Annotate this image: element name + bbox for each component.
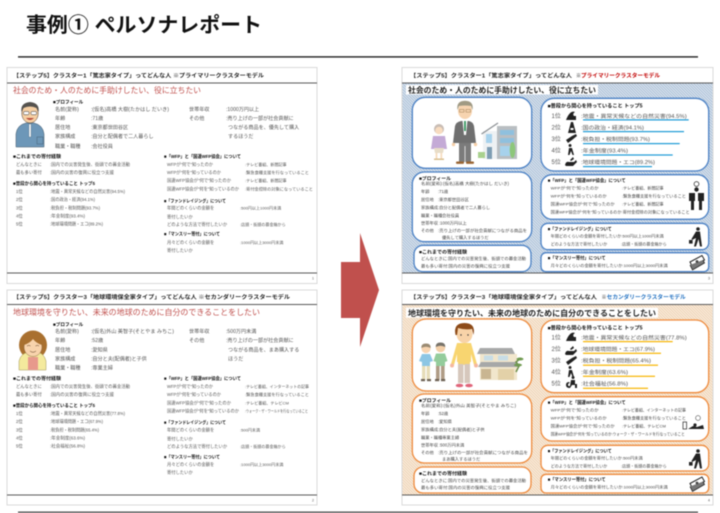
WFP section: :テレビ番組、新聞記事	[245, 161, 287, 167]
panel: WFP: ■「WFP」と「国連WFP協会」について	[548, 399, 626, 406]
ranking rows: 1位	[552, 112, 561, 120]
panel: fundraising: ■「ファンドレイジング」について	[548, 225, 612, 232]
panel: WFP: 国連WFP協会が"何で"知ったのか	[551, 423, 615, 429]
monthly section: :1000円以上3000円未満	[240, 461, 283, 467]
WFP section: WFPが"何を"知っているのか	[167, 169, 222, 176]
heading: slide 4	[410, 293, 686, 301]
panel: fundraising: :店頭・街頭の募金箱から	[621, 240, 667, 246]
title: 事例① ペルソナレポート	[26, 14, 262, 37]
profile: ほうだ	[228, 357, 243, 363]
panel: slide 2 before	[7, 290, 317, 505]
interests top 5: 4位	[16, 212, 23, 218]
profile: 家族構成	[55, 133, 75, 140]
panel: WFP: 国連WFP協会が"何を"知っているのか:寄付金控除の対象になっていること	[551, 209, 690, 215]
donation history	[13, 375, 131, 398]
icon: modern house	[478, 123, 517, 159]
interests top 5: :地球環境問題・エコ(67.9%)	[50, 418, 104, 425]
profile: :500万円未満	[226, 328, 256, 335]
monthly section	[164, 453, 283, 476]
panel: fundraising: ■「ファンドレイジング」について	[548, 447, 612, 454]
tagline: 社会のため・人のために手助けしたい、役に立ちたい	[13, 85, 201, 95]
monthly section: 月々どのくらいの金額を	[167, 461, 214, 468]
panel: WFP: :テレビ番組、新聞記事	[622, 185, 664, 191]
icon: grandfather	[434, 342, 448, 381]
interests top 5: 5位	[16, 220, 23, 226]
WFP section: 国連WFP協会が"何を"知っているのか	[167, 186, 240, 193]
profile: :1000万円以上	[226, 106, 259, 113]
interests top 5: ■普段から関心を持っていること トップ5	[13, 402, 95, 409]
panel: profile: :自分と夫(配偶者)と子供	[438, 426, 485, 433]
icon: main person	[450, 323, 478, 387]
profile: :自分と夫(配偶者)と子供	[91, 356, 147, 363]
ranking rows: 2位	[552, 345, 561, 353]
panel: donation history: どんなときに:国内での災害発生後、街頭での募金活動	[421, 477, 526, 484]
donation history: 最も多い寄付	[16, 391, 42, 398]
panel: WFP: 国連WFP協会が"何を"知っているのか:ウォーク・ザ・ワールドを行なっていること	[551, 431, 685, 437]
panel: monthly: ■「マンスリー寄付」について	[548, 254, 606, 262]
fundraising section: 寄付したいか	[167, 213, 193, 220]
heading: slide 4: 【ステップ5】クラスター3「地球環境保全家タイプ」ってどんな人	[410, 293, 597, 301]
profile: :売り上げの一部が社会貢献に	[226, 337, 294, 344]
heading: slide 4: ※	[602, 294, 606, 301]
icon: japanese house	[477, 348, 524, 380]
panel: fundraising	[541, 445, 709, 471]
panel: interests top 5	[541, 320, 709, 393]
WFP section: ■「WFP」と「国連WFP協会」について	[164, 153, 241, 160]
tagline band: 社会のため・人のために手助けしたい、役に立ちたい	[408, 85, 596, 95]
profile: 職業・職種	[55, 365, 80, 372]
WFP section: :緊急食糧支援を行なっていること	[245, 169, 309, 175]
profile: 世帯年収	[189, 106, 209, 113]
panel: WFP: :テレビ番組、テレビCM	[622, 423, 666, 429]
profile: 年齢	[55, 337, 65, 344]
panel: WFP: WFPが"何を"知っているのか	[551, 193, 607, 199]
panel: profile: ■プロフィール	[419, 397, 451, 404]
profile: 居住地	[55, 347, 70, 354]
interests top 5: 2位	[16, 418, 23, 424]
page number: 2	[312, 498, 314, 502]
fundraising section	[164, 197, 286, 228]
WFP section: 国連WFP協会が"何で"知ったのか	[167, 400, 232, 407]
panel: fundraising: どのような方法で寄付したいか	[551, 462, 607, 468]
panel: profile: :会社役員	[441, 212, 460, 219]
WFP section: :テレビ番組、インターネットの記事	[245, 383, 309, 389]
interests top 5: :国の政治・経済(94.1%)	[50, 196, 96, 203]
profile	[53, 99, 299, 150]
profile: 職業・職種	[55, 143, 80, 150]
panel: WFP: 国連WFP協会が"何で"知ったのか	[551, 201, 615, 207]
ranking rows: :税負担・税制問題(65.4%)	[581, 356, 651, 364]
interests top 5	[13, 180, 126, 227]
fundraising section: どのような方法で寄付したいか	[167, 221, 228, 228]
donation history: どんなときに	[16, 383, 42, 390]
profile: 年齢	[55, 115, 65, 122]
panel: donation history: ■これまでの寄付経験	[419, 248, 467, 255]
panel: profile: :自分と配偶者で二人暮らし	[438, 204, 490, 211]
fundraising section: ■「ファンドレイジング」について	[164, 419, 226, 426]
heading: slide 3: プライマリークラスターモデル	[581, 71, 660, 79]
WFP section	[164, 153, 313, 193]
fundraising section: 年間どのくらいの金額を	[167, 427, 214, 434]
profile: するほうだ	[228, 134, 253, 140]
panel: profile: :52歳	[438, 410, 449, 416]
panel: profile: :売り上げの一部が社会貢献につながる商品を	[438, 449, 528, 456]
WFP section: WFPが"何で"知ったのか	[167, 383, 214, 390]
icon: man in suit	[452, 101, 477, 164]
panel: profile: 居住地	[421, 418, 435, 425]
donation history: :国内の災害の復興に役立つ支援	[50, 169, 115, 176]
interests top 5: :社会福祉(56.8%)	[50, 443, 86, 450]
icon: money stack	[690, 477, 704, 492]
ranking rows: :地球環境問題・エコ(67.9%)	[581, 345, 655, 353]
icon: man avatar	[16, 102, 44, 147]
icon: lying person with phone	[683, 416, 704, 429]
WFP section: :緊急食糧支援を行なっていること	[245, 391, 309, 397]
profile: :自分と配偶者で二人暮らし	[91, 133, 154, 140]
page number: 4	[708, 498, 710, 502]
panel: profile: その他	[421, 449, 435, 456]
profile: その他	[189, 115, 204, 122]
panel: interests top 5: ■普段から関心を持っていること トップ5	[548, 103, 643, 110]
donation history: 最も多い寄付	[16, 169, 42, 176]
panel: profile: :東京都世田谷区	[438, 196, 470, 203]
WFP section: ■「WFP」と「国連WFP協会」について	[164, 375, 241, 382]
icon: person with bag	[689, 449, 702, 468]
interests top 5: :税負担・税制問題(65.4%)	[50, 427, 100, 434]
fundraising section: :店頭・街頭の募金箱から	[240, 221, 286, 227]
panel: profile: :71歳	[438, 188, 449, 194]
profile	[53, 321, 299, 372]
heading: slide 3	[410, 71, 660, 79]
panel: profile: 優先して購入するほうだ	[442, 234, 489, 241]
bar underlines	[583, 119, 689, 167]
heading: slide 3: ※	[576, 72, 581, 79]
profile: :会社役員	[91, 143, 113, 150]
interests top 5: 3位	[16, 204, 23, 210]
monthly section	[164, 231, 283, 254]
panel: WFP: :緊急食糧支援を行なっていること	[622, 415, 686, 421]
ranking rows: :地震・異常天候などの自然災害(94.5%)	[581, 112, 687, 120]
interests top 5: 3位	[16, 427, 23, 433]
panel: WFP: WFPが"何で"知ったのか	[551, 185, 599, 191]
ranking rows: :年金制度(63.6%)	[581, 368, 628, 376]
panel: profile: :1000万円以上	[439, 220, 467, 227]
profile: :専業主婦	[91, 365, 113, 372]
interests top 5: :税負担・税制問題(93.7%)	[50, 204, 101, 211]
profile: 家族構成	[55, 356, 75, 363]
panel: profile: その他	[421, 227, 435, 234]
WFP section: :テレビ番組、新聞記事	[245, 177, 287, 183]
interests top 5: :地震・異常天候などの自然災害(77.8%)	[50, 410, 126, 417]
donation history: ■これまでの寄付経験	[13, 153, 61, 160]
panel: fundraising: 年間どのくらいの金額を寄付したいか:500円未満	[551, 455, 643, 461]
panel: profile: 家族構成	[421, 426, 439, 433]
bottom rule	[18, 512, 698, 513]
interests top 5: :地球環境問題・エコ(89.2%)	[50, 220, 104, 227]
panel: profile: 名前(愛称):(仮名)外山 美智子(そとやま みちこ)	[421, 402, 517, 409]
profile: :52歳	[91, 337, 103, 344]
ranking rows: :年金制度(93.4%)	[581, 146, 628, 154]
monthly section: 月々どのくらいの金額を	[167, 239, 214, 246]
panel: donation history: ■これまでの寄付経験	[419, 470, 467, 477]
panel: fundraising: :店頭・街頭の募金箱から	[621, 462, 667, 468]
WFP section: WFPが"何を"知っているのか	[167, 391, 222, 398]
icon: father	[419, 344, 433, 381]
profile: その他	[189, 337, 204, 344]
monthly section: ■「マンスリー寄付」について	[164, 453, 220, 460]
bar underlines	[583, 341, 673, 389]
panel: WFP: :テレビ番組、インターネットの記事	[622, 407, 686, 413]
panel: WFP	[541, 397, 709, 441]
panel: profile: :愛知県	[438, 418, 453, 425]
arrow	[341, 233, 379, 347]
panel: donation history: 最も多い寄付:国内の災害の復興に役立つ支援	[421, 262, 511, 270]
panel: profile: 職業・職種	[421, 212, 443, 219]
monthly section: 寄付したいか	[167, 469, 193, 476]
interests top 5: :年金制度(93.4%)	[50, 212, 86, 219]
panel: donation history: どんなときに:国内での災害発生後、街頭での募金活動	[421, 255, 526, 262]
panel: profile: 居住地	[421, 196, 435, 203]
page number: 1	[312, 276, 314, 280]
panel: slide 3 after	[402, 68, 713, 284]
ranking rows: 4位	[552, 146, 561, 154]
profile: :愛知県	[91, 347, 108, 354]
ranking rows: :社会福祉(56.8%)	[581, 380, 628, 388]
panel: donation history: 最も多い寄付:国内の災害の復興に役立つ支援	[421, 484, 511, 491]
fundraising section: 年間どのくらいの金額を	[167, 205, 214, 212]
interests top 5: 1位	[16, 188, 23, 194]
icon: elderly woman	[431, 124, 447, 160]
panel: donation history	[414, 467, 531, 493]
donation history: :国内での災害発生後、街頭での募金活動	[50, 161, 131, 168]
panel: fundraising	[541, 223, 709, 250]
panel: monthly	[541, 253, 709, 272]
interests top 5: 2位	[16, 196, 23, 202]
panel: WFP	[541, 175, 709, 219]
profile: つながる商品を、まあ購入する	[228, 347, 299, 354]
profile: :(仮名)外山 美智子(そとやま みちこ)	[91, 328, 174, 335]
WFP section: WFPが"何で"知ったのか	[167, 161, 214, 168]
panel: fundraising: どのような方法で寄付したいか	[551, 240, 607, 246]
panel: profile: 年齢	[421, 410, 430, 417]
panel: monthly	[541, 474, 709, 493]
heading: slide 1: 【ステップ5】クラスター1「篤志家タイプ」ってどんな人 ※プライマリークラスターモデル	[13, 71, 264, 79]
WFP section: 国連WFP協会が"何を"知っているのか	[167, 408, 240, 415]
profile: ■プロフィール	[53, 321, 84, 328]
panel: profile: 家族構成	[421, 204, 439, 211]
title rule	[18, 56, 698, 58]
panel: profile	[412, 172, 532, 242]
panel: WFP: WFPが"何を"知っているのか	[551, 415, 607, 421]
interests top 5: ■普段から関心を持っていること トップ5	[13, 180, 95, 187]
ranking icons	[565, 112, 577, 166]
panel: profile: 名前(愛称):(仮名)高橋 大樹(たかはし だいき)	[421, 180, 510, 187]
profile: つながる商品を、優先して購入	[228, 124, 299, 131]
tagline: 地球環境を守りたい、未来の地球のために自分のできることをしたい	[13, 307, 260, 317]
profile: 世帯年収	[189, 328, 209, 335]
profile: :71歳	[91, 115, 103, 122]
panel: fundraising: 年間どのくらいの金額を寄付したいか:500円以上1000円未満	[551, 233, 664, 239]
panel: profile	[412, 394, 532, 463]
panel: donation history	[414, 245, 531, 272]
panel: profile: 年齢	[421, 188, 430, 195]
WFP section: :寄付金控除の対象になっていること	[245, 186, 313, 192]
profile: 居住地	[55, 124, 70, 131]
monthly section: :1000円以上3000円未満	[240, 239, 283, 245]
ranking rows: 1位	[552, 334, 561, 342]
fundraising section: :500円未満	[240, 427, 260, 433]
donation history: ■これまでの寄付経験	[13, 375, 61, 382]
heading: slide 2: 【ステップ5】クラスター3「地球環境保全家タイプ」ってどんな人 ※セカンダリークラスターモデル	[13, 293, 290, 301]
panel: monthly: 月々どのくらいの金額を寄付したいか:1000円以上3000円未満	[551, 484, 668, 490]
donation history	[13, 153, 131, 176]
panel: slide 1 before	[7, 68, 317, 284]
panel: monthly: 月々どのくらいの金額を寄付したいか:1000円以上3000円未満	[551, 262, 668, 268]
panel: illustration	[412, 97, 532, 168]
interests top 5: 1位	[16, 410, 23, 416]
interests top 5: 4位	[16, 435, 23, 441]
panel: profile: :売り上げの一部が社会貢献につながる商品を	[438, 227, 527, 234]
WFP section: :ウォーク・ザ・ワールドを行なっていること	[245, 408, 308, 414]
panel: profile: まあ購入するほうだ	[442, 455, 481, 462]
panel: profile: 世帯年収	[421, 220, 439, 227]
interests top 5: :地震・異常天候などの自然災害(94.5%)	[50, 188, 126, 195]
interests top 5: 5位	[16, 443, 23, 449]
ranking icons	[565, 333, 577, 388]
ranking rows: 3位	[552, 135, 561, 143]
ranking rows: :国の政治・経済(94.1%)	[581, 124, 644, 132]
monthly section: ■「マンスリー寄付」について	[164, 231, 220, 238]
ranking rows: 4位	[552, 368, 561, 376]
profile: 名前(愛称)	[55, 106, 79, 113]
icon: person with newspaper	[689, 182, 704, 210]
profile: :売り上げの一部が社会貢献に	[226, 115, 294, 122]
tagline band: 地球環境を守りたい、未来の地球のために自分のできることをしたい	[408, 308, 656, 318]
profile: ■プロフィール	[53, 99, 84, 106]
panel: profile: 職業・職種	[421, 434, 443, 441]
interests top 5: :年金制度(63.6%)	[50, 435, 86, 442]
heading: slide 3: 【ステップ5】クラスター1「篤志家タイプ」ってどんな人	[410, 71, 572, 79]
ranking rows: 3位	[552, 356, 561, 364]
donation history: :国内での災害発生後、街頭での募金活動	[50, 383, 131, 390]
icon: woman avatar	[19, 330, 47, 370]
monthly section: 寄付したいか	[167, 247, 193, 254]
panel: WFP: :緊急食糧支援を行なっていること	[622, 193, 686, 199]
profile: 名前(愛称)	[55, 328, 79, 335]
page number: 3	[708, 276, 710, 280]
panel: profile: :専業主婦	[441, 434, 460, 441]
profile: :東京都世田谷区	[91, 124, 128, 131]
icon: person with bag	[689, 227, 702, 246]
WFP section: 国連WFP協会が"何で"知ったのか	[167, 177, 232, 184]
fundraising section: ■「ファンドレイジング」について	[164, 197, 226, 204]
heading: slide 4: セカンダリークラスターモデル	[607, 293, 686, 301]
panel: WFP: ■「WFP」と「国連WFP協会」について	[548, 177, 626, 184]
panel: interests top 5: ■普段から関心を持っていること トップ5	[548, 325, 643, 332]
WFP section: :テレビ番組、テレビCM	[245, 400, 289, 406]
panel: profile: :500万円未満	[439, 442, 465, 449]
panel: profile: 世帯年収	[421, 442, 439, 449]
ranking rows	[552, 112, 687, 166]
fundraising section: :店頭・街頭の募金箱から	[240, 443, 286, 449]
fundraising section: :500円以上1000円未満	[240, 205, 281, 211]
panel: interests top 5	[541, 98, 709, 171]
fundraising section: どのような方法で寄付したいか	[167, 443, 228, 450]
panel: illustration	[412, 319, 532, 391]
ranking rows: 5位	[552, 380, 561, 388]
interests top 5	[13, 402, 126, 450]
fundraising section	[164, 419, 286, 450]
ranking rows: 2位	[552, 124, 561, 132]
panel: WFP: WFPが"何で"知ったのか	[551, 407, 599, 413]
fundraising section: 寄付したいか	[167, 435, 193, 442]
ranking rows: 5位	[552, 158, 561, 166]
ranking rows: :地球環境問題・エコ(89.2%)	[581, 158, 655, 166]
donation history: どんなときに	[16, 161, 42, 168]
panel: profile: ■プロフィール	[419, 175, 451, 182]
panel: WFP: :テレビ番組、新聞記事	[622, 201, 664, 207]
panel: monthly: ■「マンスリー寄付」について	[548, 476, 606, 483]
icon: money stack	[690, 256, 704, 270]
donation history: :国内の災害の復興に役立つ支援	[50, 391, 115, 398]
ranking rows: :税負担・税制問題(93.7%)	[581, 135, 650, 143]
ranking rows: :地震・異常天候などの自然災害(77.8%)	[581, 334, 687, 342]
ranking rows	[552, 334, 687, 388]
panel: slide 4 after	[402, 290, 713, 505]
WFP section	[164, 375, 309, 415]
profile: :(仮名)高橋 大樹(たかはし だいき)	[91, 106, 169, 113]
